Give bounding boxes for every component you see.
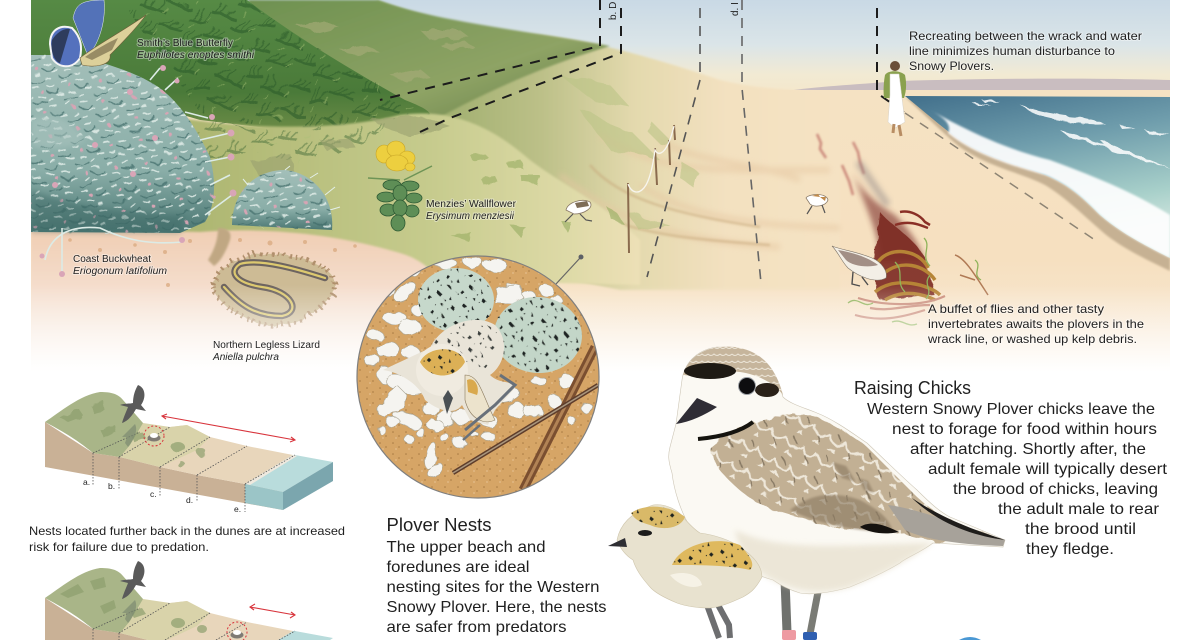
green grass dune — [31, 0, 431, 132]
blue logo hint — [959, 637, 981, 640]
grey shadow patches — [250, 116, 450, 176]
ocean — [905, 96, 1170, 258]
text block: Raising Chicks: Western Snowy Plover chicks leave the — [867, 401, 1155, 418]
bottom white fade — [31, 285, 1170, 372]
zone labels a-e: e. — [234, 504, 241, 514]
belly shadow — [735, 530, 933, 592]
nest marker 1 — [144, 426, 164, 446]
chick crown — [631, 507, 685, 528]
green seaweed — [848, 238, 981, 325]
label: Northern Legless Lizard: Aniella pulchra — [212, 352, 279, 363]
zone labels a-e — [83, 477, 241, 514]
legs and colour bands — [782, 580, 818, 640]
label: Coast Buckwheat — [73, 254, 167, 277]
text block: Raising Chicks: the adult male to rear — [998, 501, 1160, 518]
neck bar — [698, 422, 753, 439]
label: Northern Legless Lizard: Northern Legless Lizard — [213, 340, 320, 351]
chick wing — [672, 541, 752, 570]
dune green top — [45, 392, 143, 457]
text block: Plover Nests: are safer from predators — [386, 619, 566, 636]
wrack line kelp — [817, 134, 988, 325]
nest chick — [383, 320, 515, 425]
text block: Raising Chicks: the brood of chicks, leaving — [953, 481, 1158, 498]
plover foraging at wrack — [832, 246, 886, 286]
eggs — [418, 268, 494, 332]
plover chick near wrack — [806, 194, 828, 214]
chick beak — [608, 538, 627, 547]
chick body — [617, 505, 762, 608]
text block: Plover Nests — [386, 539, 606, 636]
callout: recreating between wrack and water: Snowy Plovers. — [909, 59, 994, 73]
panel: predation risk diagram 2 — [45, 568, 333, 640]
distant purple headland — [795, 78, 1170, 90]
raptor 2 — [120, 561, 146, 623]
text block: Plover Nests: foredunes are ideal — [386, 559, 530, 576]
wing darker patches — [790, 462, 893, 532]
chick eye — [638, 530, 652, 536]
zone dotted lines — [93, 427, 295, 512]
small plover on foredune — [565, 200, 592, 222]
chick legs — [707, 603, 730, 638]
beak — [676, 398, 717, 424]
callout: buffet of flies: wrack line, or washed up kelp debris. — [927, 332, 1137, 346]
body — [669, 347, 1005, 594]
zone labels a-e: c. — [150, 489, 157, 499]
northern legless lizard in burrow — [208, 228, 335, 325]
dark sand fold — [590, 165, 770, 245]
label: Smith's Blue Butterfly — [137, 38, 255, 61]
primaries — [888, 505, 1005, 546]
label: Smith's Blue Butterfly: Smith’s Blue Butterfly — [137, 38, 233, 49]
grey weed streak — [858, 162, 888, 205]
zone labels a-e: b. — [108, 481, 115, 491]
symbolic fence posts and rope — [628, 125, 675, 253]
panel: predation risk diagram 1 — [45, 392, 333, 512]
text block: Raising Chicks: after hatching. Shortly after, the — [910, 441, 1146, 458]
foredune vegetation patches — [450, 153, 625, 241]
brown kelp loops — [875, 252, 940, 300]
heading: Raising Chicks: Raising Chicks — [854, 378, 971, 398]
forehead bar — [684, 363, 736, 379]
beach sand — [31, 90, 1170, 372]
person walking on beach — [884, 61, 906, 136]
large coast buckwheat shrub — [31, 55, 236, 277]
text block: Plover Nests: The upper beach and — [386, 539, 546, 556]
eye — [738, 378, 756, 394]
surf and water top — [245, 455, 333, 492]
text block: Raising Chicks: adult female will typically desert — [928, 461, 1168, 478]
block soil front — [45, 422, 283, 510]
surf foam — [930, 98, 1170, 258]
wet sand edge — [905, 97, 1170, 271]
callout: recreating between wrack and water: line minimizes human disturbance to — [909, 44, 1115, 58]
nest rocks — [364, 257, 593, 479]
callout: buffet of flies: A buffet of flies and other tasty — [928, 302, 1104, 316]
label: Coast Buckwheat: Eriogonum latifolium — [73, 266, 167, 277]
wing feathers — [710, 414, 1005, 542]
sand pebbles — [68, 238, 357, 287]
zone labels a-e: d. — [186, 495, 193, 505]
callout: recreating between wrack and water — [909, 29, 1142, 73]
lower grass band — [198, 118, 394, 160]
rotated zone labels: d. I — [730, 2, 741, 16]
red range arrow 2 — [250, 604, 295, 618]
dark red fronds — [895, 212, 930, 228]
Snowy Plover chick — [608, 505, 762, 638]
sand top — [100, 425, 293, 484]
small coast buckwheat shrub — [232, 166, 340, 230]
scattered red weed — [817, 134, 864, 195]
callout: buffet of flies: invertebrates awaits the plovers in the — [928, 317, 1144, 331]
leader line to nest — [556, 254, 584, 284]
foredune — [180, 113, 640, 285]
butterfly: Smith's Blue — [50, 0, 146, 66]
water side — [283, 462, 333, 510]
caption: risk for failure due to predation. — [29, 540, 209, 554]
ear patch — [755, 383, 779, 397]
left sand bank — [31, 229, 428, 294]
zone labels a-e: a. — [83, 477, 90, 487]
text block: Raising Chicks — [867, 401, 1168, 558]
text block: Plover Nests: Snowy Plover. Here, the nests — [386, 599, 606, 616]
grass texture — [120, 0, 431, 132]
adult Western Snowy Plover — [669, 347, 1005, 640]
pale tendrils — [855, 296, 945, 319]
raptor — [120, 385, 146, 447]
text block: Raising Chicks: they fledge. — [1026, 541, 1114, 558]
text block: Plover Nests: nesting sites for the Western — [386, 579, 600, 596]
sticks — [523, 347, 595, 490]
crown — [683, 347, 783, 395]
red kelp mass — [852, 172, 923, 262]
olive dune patches — [295, 22, 475, 81]
rear pale dune — [377, 0, 840, 290]
caption — [29, 524, 345, 554]
small washed debris — [955, 255, 988, 295]
text block: Raising Chicks: nest to forage for food within hours — [892, 421, 1157, 438]
label: Menzies' Wallflower: Erysimum menziesii — [426, 211, 515, 222]
wallflower plant — [368, 141, 432, 231]
text block: Raising Chicks: the brood until — [1025, 521, 1136, 538]
sky — [247, 0, 1170, 90]
label: Coast Buckwheat: Coast Buckwheat — [73, 254, 151, 265]
label: Smith's Blue Butterfly: Euphilotes enoptes smithi — [137, 50, 255, 61]
label: Northern Legless Lizard — [212, 340, 320, 363]
heading: Plover Nests: Plover Nests — [386, 515, 492, 535]
callout: recreating between wrack and water: Recreating between the wrack and water — [909, 29, 1142, 43]
caption: Nests located further back in the dunes are at increased — [29, 524, 345, 538]
zone boundary dashed lines — [380, 0, 1095, 283]
nest inset circle — [357, 256, 599, 498]
nest marker 2 — [227, 622, 247, 640]
water front — [245, 484, 283, 510]
olive upper dune — [247, 0, 610, 128]
sand stripes on dune — [560, 135, 840, 247]
foredune green top — [93, 423, 210, 467]
rotated zone labels: b. D — [608, 2, 619, 20]
background illustration: beach habitat scene — [31, 0, 1170, 372]
label: Menzies' Wallflower: Menzies’ Wallflower — [426, 199, 517, 210]
red range arrow 1 — [162, 414, 295, 442]
rotated zone labels — [608, 2, 741, 20]
callout: buffet of flies — [927, 302, 1144, 346]
label: Menzies' Wallflower — [426, 199, 517, 222]
